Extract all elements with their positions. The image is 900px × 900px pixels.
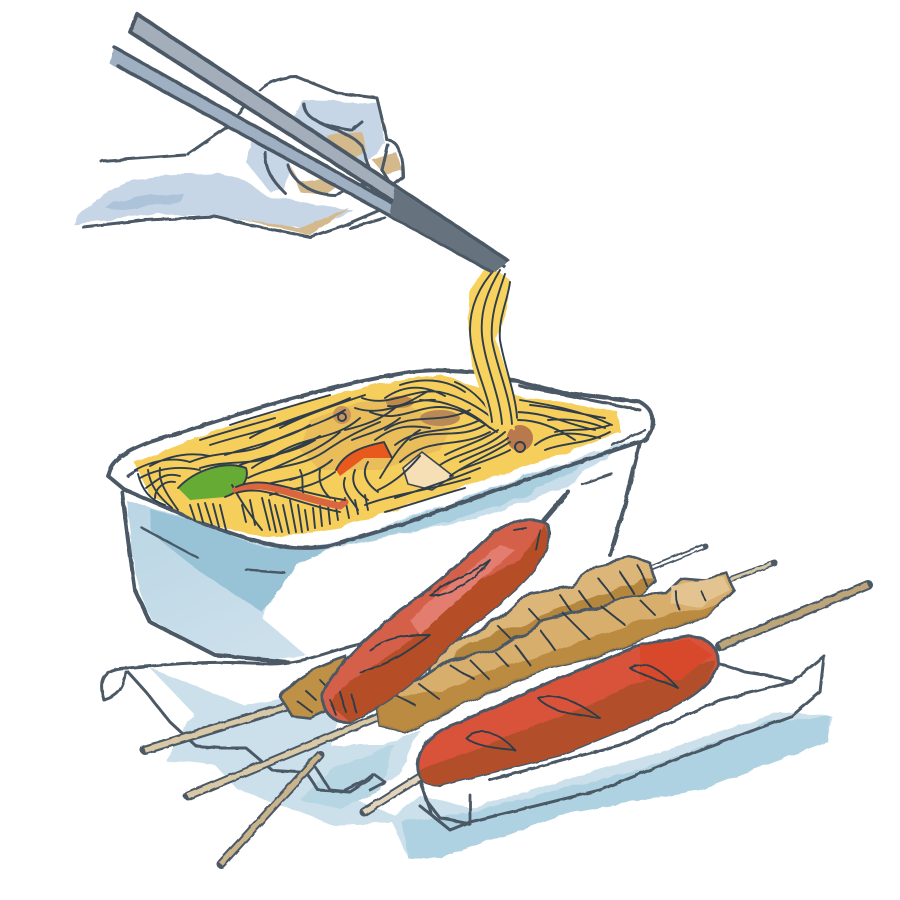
skewer sticks — [145, 492, 868, 864]
tofu piece — [403, 452, 453, 490]
noodles in tray — [134, 374, 620, 538]
green pepper — [178, 465, 247, 500]
red sausage upper — [322, 520, 549, 722]
lower tan skewer — [376, 574, 734, 733]
tray blue wash — [126, 440, 630, 660]
stick tips — [540, 492, 775, 580]
hand — [73, 77, 403, 237]
front paper fold — [345, 775, 470, 830]
tray outline — [108, 370, 653, 662]
chopsticks — [110, 14, 507, 272]
red sausage front — [418, 636, 718, 785]
chopstick dark tips — [390, 188, 507, 272]
noodle yellow base — [134, 374, 620, 538]
stick left — [145, 705, 292, 750]
noodle strands — [135, 380, 612, 533]
hand skin tones — [236, 132, 402, 235]
hand blue wash — [73, 100, 385, 228]
hand outline — [83, 77, 403, 237]
carrot piece — [336, 442, 392, 476]
stick right — [720, 585, 868, 646]
upper chopstick — [130, 14, 507, 268]
paper wrapper outline — [102, 640, 824, 830]
stick lower — [188, 716, 380, 796]
upper tan skewer — [283, 558, 654, 718]
stick of front sausage — [364, 772, 428, 812]
tray body — [108, 370, 653, 662]
tray noodle food outline — [178, 413, 525, 512]
lifted noodles — [468, 264, 518, 430]
table wash shadow — [150, 668, 832, 858]
stick third — [221, 755, 320, 864]
lower chopstick — [110, 47, 504, 272]
